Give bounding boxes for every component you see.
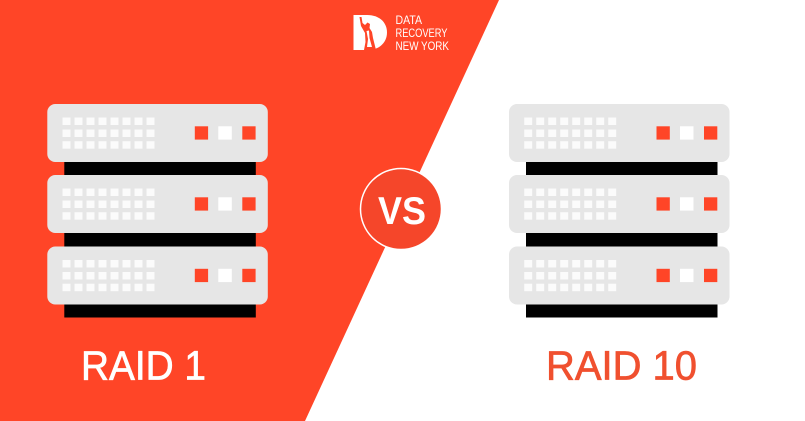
vs badge — [360, 168, 442, 250]
heading: RAID 10: RAID 10 — [546, 342, 697, 388]
icon: D with statue of liberty — [354, 15, 387, 50]
logo text: DATA — [396, 15, 422, 27]
server stack: RAID 1 — [47, 104, 268, 318]
logo text: NEW YORK — [396, 41, 449, 53]
vs badge: VS — [378, 190, 426, 233]
logo text — [396, 15, 449, 53]
logo: Data Recovery New York — [354, 15, 449, 53]
server stack: RAID 10 — [509, 104, 730, 318]
panel: orange diagonal background — [0, 0, 499, 421]
heading: RAID 1: RAID 1 — [81, 342, 206, 388]
logo text: RECOVERY — [396, 28, 448, 40]
